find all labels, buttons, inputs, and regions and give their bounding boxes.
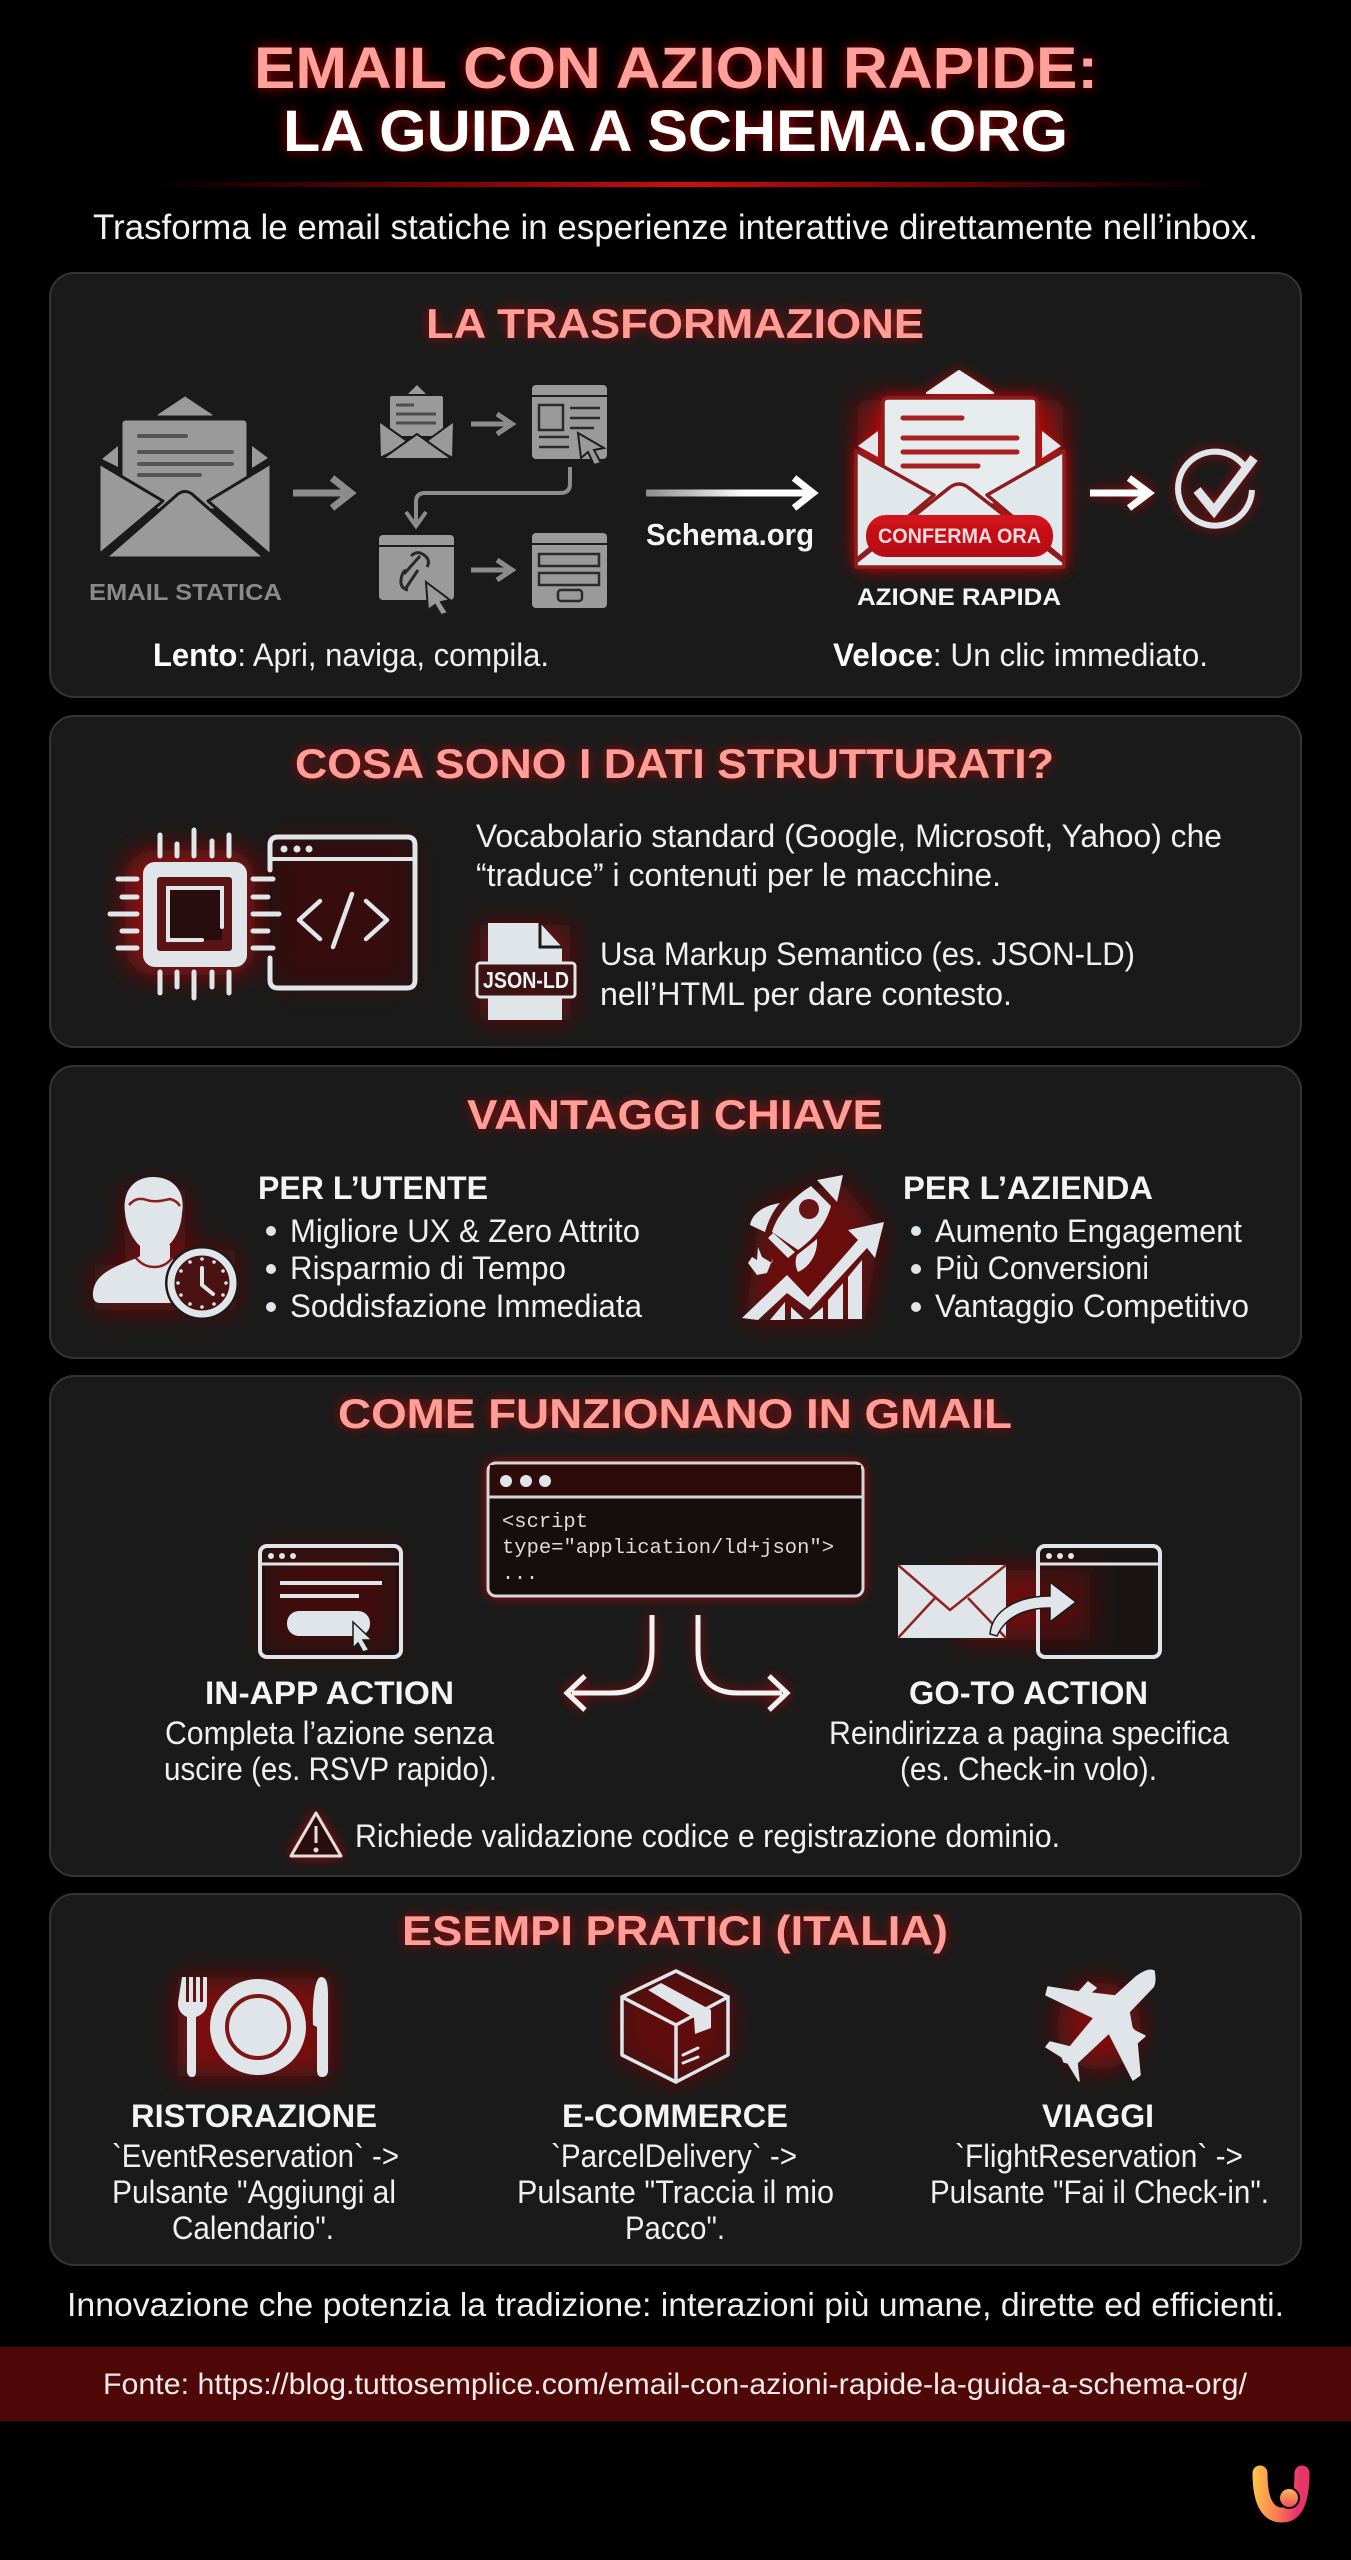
icon: plane bbox=[1046, 1970, 1155, 2081]
icon: json-ld file bbox=[477, 923, 575, 1020]
icon: interactive email bbox=[856, 371, 1064, 567]
heading: COME FUNZIONANO IN GMAIL bbox=[338, 1390, 1012, 1437]
heading: VANTAGGI CHIAVE bbox=[467, 1091, 883, 1138]
panel: come funzionano in gmail bbox=[50, 1376, 1301, 1876]
label: azione rapida: AZIONE RAPIDA bbox=[857, 584, 1061, 611]
list: business benefits: Più Conversioni bbox=[935, 1250, 1149, 1286]
text block: (es. Check-in volo). bbox=[900, 1751, 1157, 1787]
list: user benefits: Migliore UX & Zero Attrito bbox=[290, 1213, 640, 1249]
icon: warning bbox=[291, 1813, 341, 1856]
caption: lento: Lento: Apri, naviga, compila. bbox=[153, 637, 549, 673]
code window: type="application/ld+json"> bbox=[502, 1537, 834, 1560]
column: ristorazione: Calendario". bbox=[172, 2210, 334, 2246]
code window: ... bbox=[502, 1563, 538, 1586]
subheading: go-to action: GO-TO ACTION bbox=[909, 1675, 1148, 1711]
list: business benefits bbox=[911, 1213, 1249, 1324]
column: viaggi: Pulsante "Fai il Check-in". bbox=[930, 2174, 1269, 2210]
list: user benefits bbox=[266, 1213, 642, 1324]
arrow bbox=[471, 414, 512, 434]
icon: in-app window bbox=[260, 1546, 401, 1657]
column: viaggi bbox=[930, 2098, 1269, 2210]
list: business benefits: Aumento Engagement bbox=[935, 1213, 1242, 1249]
column: ristorazione bbox=[112, 2098, 399, 2246]
source band: Fonte: https://blog.tuttosemplice.com/email-con-azioni-rapide-la-guida-a-schema-org/ bbox=[103, 2368, 1248, 2401]
arrow bbox=[471, 560, 512, 580]
subheading: PER L’AZIENDA bbox=[903, 1170, 1153, 1206]
code window bbox=[488, 1463, 863, 1596]
logo bbox=[1260, 2473, 1302, 2515]
column: e-commerce: `ParcelDelivery` -> bbox=[551, 2138, 797, 2174]
source band bbox=[0, 2347, 1351, 2421]
column: viaggi: VIAGGI bbox=[1042, 2098, 1154, 2134]
text block: “traduce” i contenuti per le macchine. bbox=[476, 857, 1001, 893]
list: user benefits: Risparmio di Tempo bbox=[290, 1250, 566, 1286]
title bbox=[254, 36, 1098, 164]
arrow bbox=[1090, 478, 1149, 508]
text block: Completa l’azione senza bbox=[165, 1715, 494, 1751]
icon: go-to action bbox=[898, 1546, 1160, 1657]
icon: restaurant bbox=[178, 1977, 330, 2077]
column: e-commerce: E-COMMERCE bbox=[562, 2098, 788, 2134]
icon: static email bbox=[99, 397, 271, 558]
icon: user with clock bbox=[93, 1177, 239, 1320]
icon: interactive email: CONFERMA ORA bbox=[878, 525, 1041, 548]
caption: veloce: Veloce: Un clic immediato. bbox=[833, 637, 1208, 673]
text block: nell’HTML per dare contesto. bbox=[600, 976, 1012, 1012]
title: EMAIL CON AZIONI RAPIDE: bbox=[254, 36, 1098, 101]
icon: parcel bbox=[622, 1971, 728, 2082]
subheading: in-app action: IN-APP ACTION bbox=[205, 1675, 454, 1711]
icon: json-ld file: JSON-LD bbox=[483, 967, 569, 993]
column: viaggi: `FlightReservation` -> bbox=[955, 2138, 1243, 2174]
heading: la trasformazione: LA TRASFORMAZIONE bbox=[426, 300, 924, 347]
column: ristorazione: RISTORAZIONE bbox=[131, 2098, 377, 2134]
column: e-commerce: Pulsante "Traccia il mio bbox=[517, 2174, 834, 2210]
column: ristorazione: Pulsante "Aggiungi al bbox=[112, 2174, 396, 2210]
heading: ESEMPI PRATICI (ITALIA) bbox=[402, 1907, 948, 1954]
list: user benefits: Soddisfazione Immediata bbox=[290, 1288, 642, 1324]
text block: Reindirizza a pagina specifica bbox=[829, 1715, 1229, 1751]
icon: chip and code window bbox=[110, 830, 415, 998]
column: ristorazione: `EventReservation` -> bbox=[112, 2138, 399, 2174]
column: e-commerce bbox=[517, 2098, 834, 2246]
icon: web form bbox=[532, 533, 607, 608]
panel: esempi pratici bbox=[50, 1894, 1301, 2265]
heading: COSA SONO I DATI STRUTTURATI? bbox=[295, 740, 1054, 787]
panel: la trasformazione bbox=[50, 273, 1301, 697]
arrow: schema.org bbox=[646, 478, 813, 508]
arrow bbox=[293, 478, 351, 508]
panel: vantaggi chiave bbox=[50, 1066, 1301, 1358]
arrow: connector bbox=[406, 467, 570, 526]
icon: check bbox=[1178, 452, 1254, 526]
title: LA GUIDA A SCHEMA.ORG bbox=[283, 99, 1068, 164]
text block: uscire (es. RSVP rapido). bbox=[164, 1751, 497, 1787]
text block: Vocabolario standard (Google, Microsoft, Yahoo) che bbox=[476, 818, 1222, 854]
closing statement: Innovazione che potenzia la tradizione: interazioni più umane, dirette ed efficienti. bbox=[67, 2286, 1284, 2323]
label: email statica: EMAIL STATICA bbox=[89, 579, 282, 605]
icon: rocket with growth chart bbox=[742, 1175, 884, 1320]
warning text: Richiede validazione codice e registrazione dominio. bbox=[355, 1818, 1060, 1854]
panel: dati strutturati bbox=[50, 716, 1301, 1047]
icon: web page with link bbox=[379, 535, 454, 615]
icon: web page with cursor bbox=[532, 385, 607, 465]
icon: small envelope bbox=[379, 385, 454, 459]
list: business benefits: Vantaggio Competitivo bbox=[935, 1288, 1249, 1324]
column: e-commerce: Pacco". bbox=[625, 2210, 725, 2246]
text block: Usa Markup Semantico (es. JSON-LD) bbox=[600, 936, 1135, 972]
subheading: PER L’UTENTE bbox=[258, 1170, 488, 1206]
subtitle: Trasforma le email statiche in esperienze interattive direttamente nell’inbox. bbox=[93, 208, 1258, 247]
arrow: split bbox=[567, 1615, 787, 1710]
label: schema.org: Schema.org bbox=[646, 517, 814, 552]
code window: <script bbox=[502, 1511, 588, 1534]
